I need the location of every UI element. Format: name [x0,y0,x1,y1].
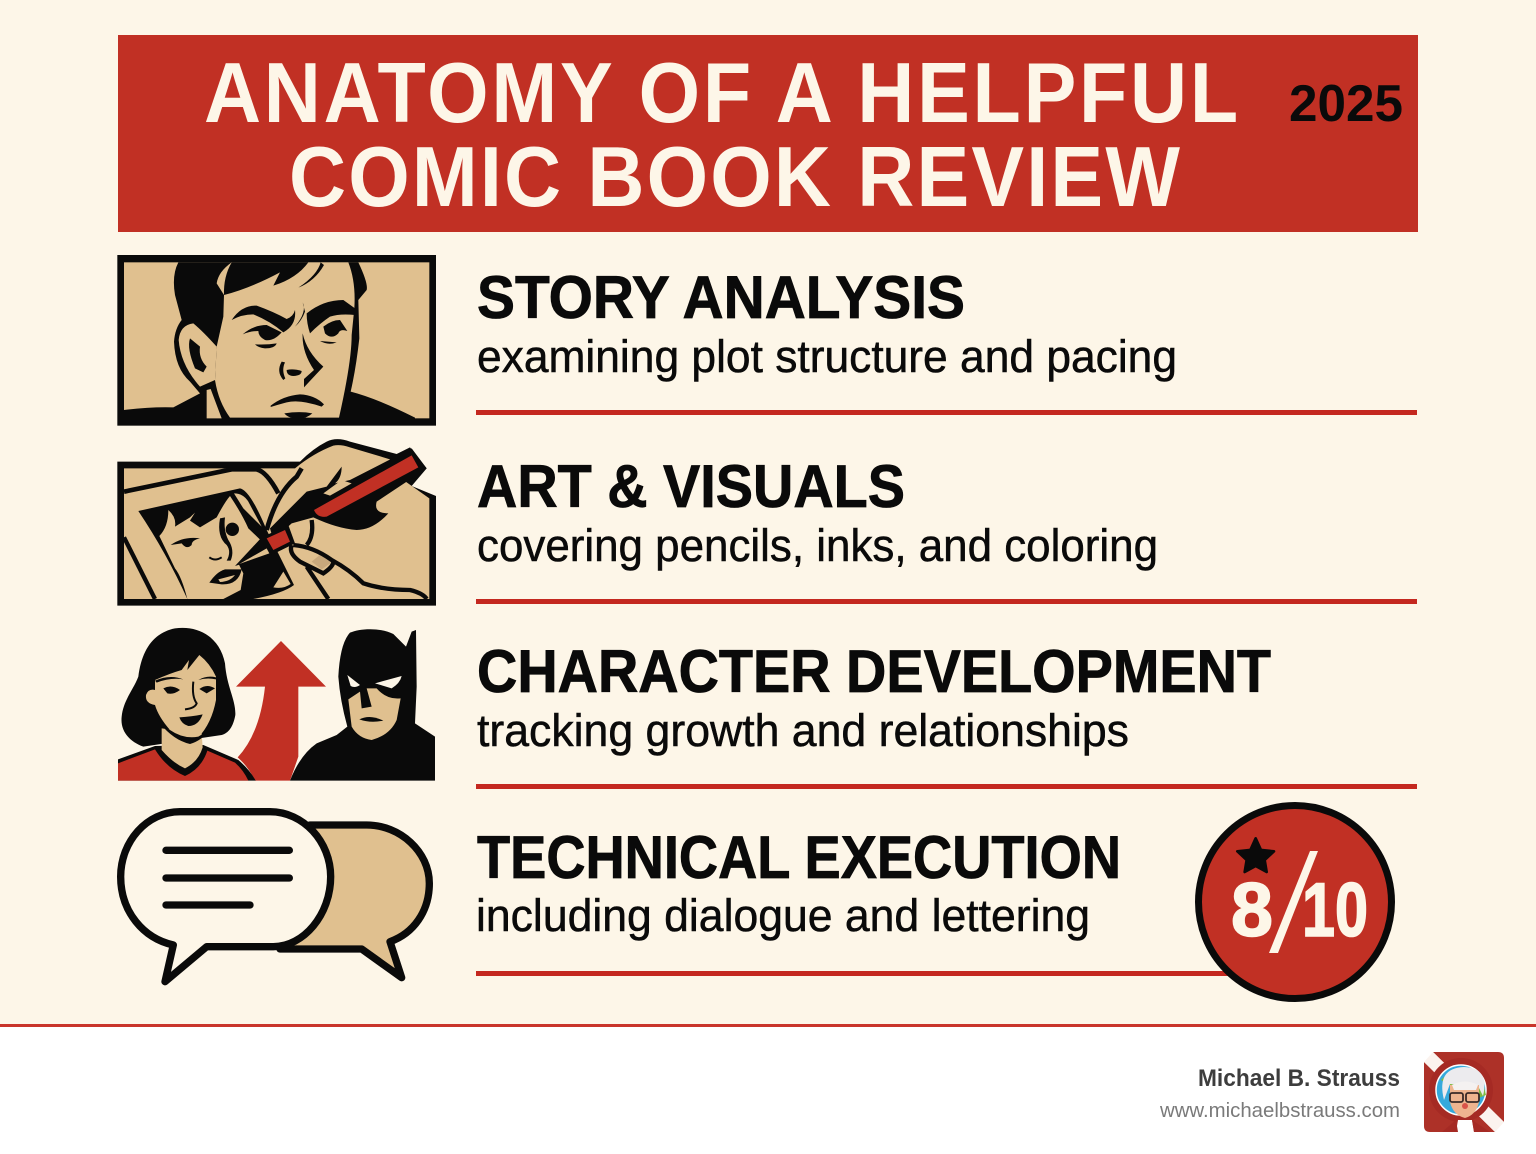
rating score: 10 [1302,868,1368,953]
text: story analysis description: examining plot structure and pacing [477,331,1177,382]
title banner [118,35,1418,232]
icon: star [1237,838,1274,872]
icon: hand drawing comic face [117,439,436,606]
icon: author avatar [1424,1052,1504,1132]
sub: pencil and shaded hand [235,448,427,566]
icon: speech bubbles [121,812,429,982]
title: ANATOMY OF A HELPFUL [204,46,1238,141]
footer [0,1024,1536,1154]
heading: technical execution: TECHNICAL EXECUTION [477,824,1121,891]
text: character development description: tracking growth and relationships [477,705,1129,756]
title [204,46,1238,225]
icon: angry man face [117,255,436,426]
text: art and visuals description: covering pencils, inks, and coloring [477,520,1158,571]
title: COMIC BOOK REVIEW [289,130,1180,225]
heading: story analysis: STORY ANALYSIS [477,264,965,331]
text: technical execution description: including dialogue and lettering [476,890,1090,941]
rating score: 8 [1231,868,1273,953]
author name: Michael B. Strauss [1198,1065,1400,1092]
heading: character development: CHARACTER DEVELOPMENT [477,638,1271,705]
rating badge 8/10 [1198,806,1392,998]
year label: 2025 [1289,75,1403,133]
heading: art and visuals: ART & VISUALS [477,453,905,520]
author website: www.michaelbstrauss.com [1159,1099,1400,1122]
icon: character growth arrow between woman and masked hero [118,628,435,781]
rating score [1231,851,1368,953]
